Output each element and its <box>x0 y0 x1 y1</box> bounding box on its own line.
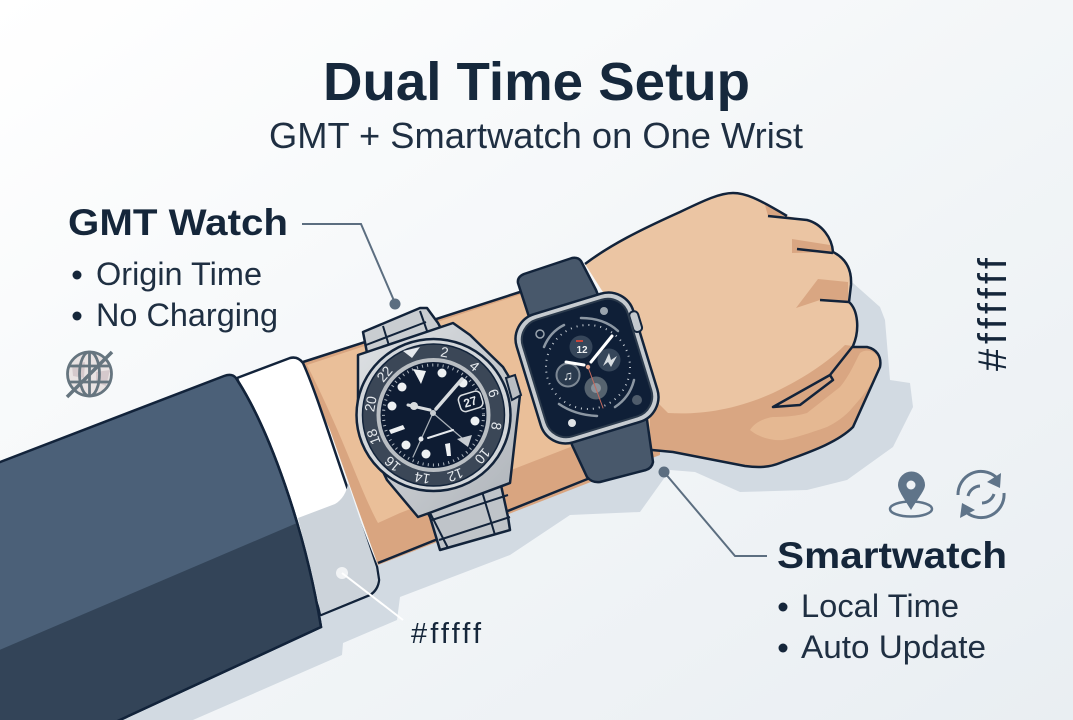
bracelet <box>358 308 520 550</box>
icon: crossed-out globe <box>67 352 112 397</box>
bezel numerals: 6 <box>485 387 503 400</box>
pointer: cuff <box>336 567 403 620</box>
bezel numerals: 12 <box>445 465 465 485</box>
bezel <box>356 339 510 491</box>
scale ring <box>546 325 630 409</box>
bezel numerals: 20 <box>361 395 380 413</box>
case <box>509 286 665 450</box>
leader line: Smartwatch <box>658 466 767 556</box>
label: cuff colour code: #fffff <box>411 618 482 650</box>
bezel numerals: 22 <box>373 363 396 385</box>
smartwatch <box>509 258 665 482</box>
bezel numerals: 2 <box>439 343 450 361</box>
bezel numerals: 16 <box>381 453 403 475</box>
label: rotated colour code: #ffffff <box>971 257 1015 371</box>
suit sleeve <box>0 375 321 720</box>
bezel numerals <box>361 343 505 487</box>
center complications: ♫ <box>563 368 573 383</box>
list: GMT features: Origin Time <box>96 256 262 292</box>
bezel numerals: 8 <box>488 421 505 432</box>
shirt cuff <box>237 358 403 620</box>
title: Dual Time Setup <box>323 52 750 112</box>
hands <box>408 379 472 457</box>
screen <box>517 294 657 442</box>
center complications <box>556 336 620 400</box>
bezel numerals: 4 <box>467 357 483 375</box>
date window <box>457 390 484 413</box>
icon: location pin <box>890 472 932 516</box>
arcs <box>544 318 634 416</box>
forearm <box>300 290 660 565</box>
crown <box>628 310 643 333</box>
list: Smartwatch features: Local Time <box>801 588 959 624</box>
bezel numerals: 18 <box>363 427 384 447</box>
watch hands <box>566 336 612 408</box>
bezel numerals: 14 <box>413 469 431 487</box>
corner complications <box>536 307 642 427</box>
leader line: GMT Watch <box>302 224 400 310</box>
subtitle: GMT + Smartwatch on One Wrist <box>269 115 803 156</box>
list: GMT features <box>72 256 278 333</box>
center complications: 12 <box>576 345 588 356</box>
strap <box>518 258 653 482</box>
bezel numerals: 10 <box>471 445 494 467</box>
crown <box>506 375 521 400</box>
GMT watch <box>356 308 521 550</box>
hand <box>585 193 880 467</box>
heading: Smartwatch: Smartwatch <box>777 535 1007 576</box>
heading: GMT Watch: GMT Watch <box>68 202 288 243</box>
list: GMT features: No Charging <box>96 297 278 333</box>
list: Smartwatch features <box>778 588 986 665</box>
list: Smartwatch features: Auto Update <box>801 629 986 665</box>
date window: 27 <box>462 393 479 411</box>
dial markers <box>384 365 484 465</box>
cast shadow of arm and hand <box>120 283 913 720</box>
icon: sync arrows <box>958 471 1004 518</box>
